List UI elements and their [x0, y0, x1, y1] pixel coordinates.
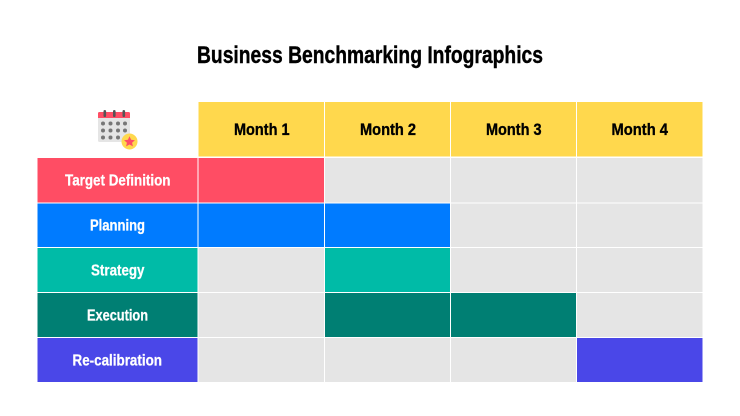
icon: calendar with star — [98, 110, 138, 150]
label: Re-calibration — [38, 338, 198, 382]
header: Month 3: Month 3 — [486, 120, 542, 139]
label: Planning — [38, 204, 198, 247]
label: Target Definition: Target Definition — [65, 172, 170, 190]
label: Execution: Execution — [87, 308, 148, 324]
row: Strategy — [38, 248, 702, 292]
row: Execution — [38, 293, 702, 337]
header row: months — [198, 102, 702, 156]
header: Month 1 — [198, 102, 324, 156]
row: Target Definition — [38, 158, 702, 202]
row: Planning — [38, 204, 702, 247]
label: Strategy — [38, 248, 198, 292]
header: Month 4 — [577, 102, 702, 156]
title: Business Benchmarking Infographics — [197, 42, 543, 69]
header: Month 1: Month 1 — [234, 120, 290, 139]
header: Month 2 — [325, 102, 450, 156]
label: Execution — [38, 293, 198, 337]
label: Strategy: Strategy — [91, 262, 145, 280]
header: Month 4: Month 4 — [612, 120, 668, 139]
label: Planning: Planning — [90, 218, 145, 234]
row: Re-calibration — [38, 338, 702, 382]
header: Month 3 — [451, 102, 576, 156]
label: Re-calibration: Re-calibration — [72, 352, 162, 370]
header: Month 2: Month 2 — [360, 120, 416, 139]
label: Target Definition — [38, 158, 198, 202]
